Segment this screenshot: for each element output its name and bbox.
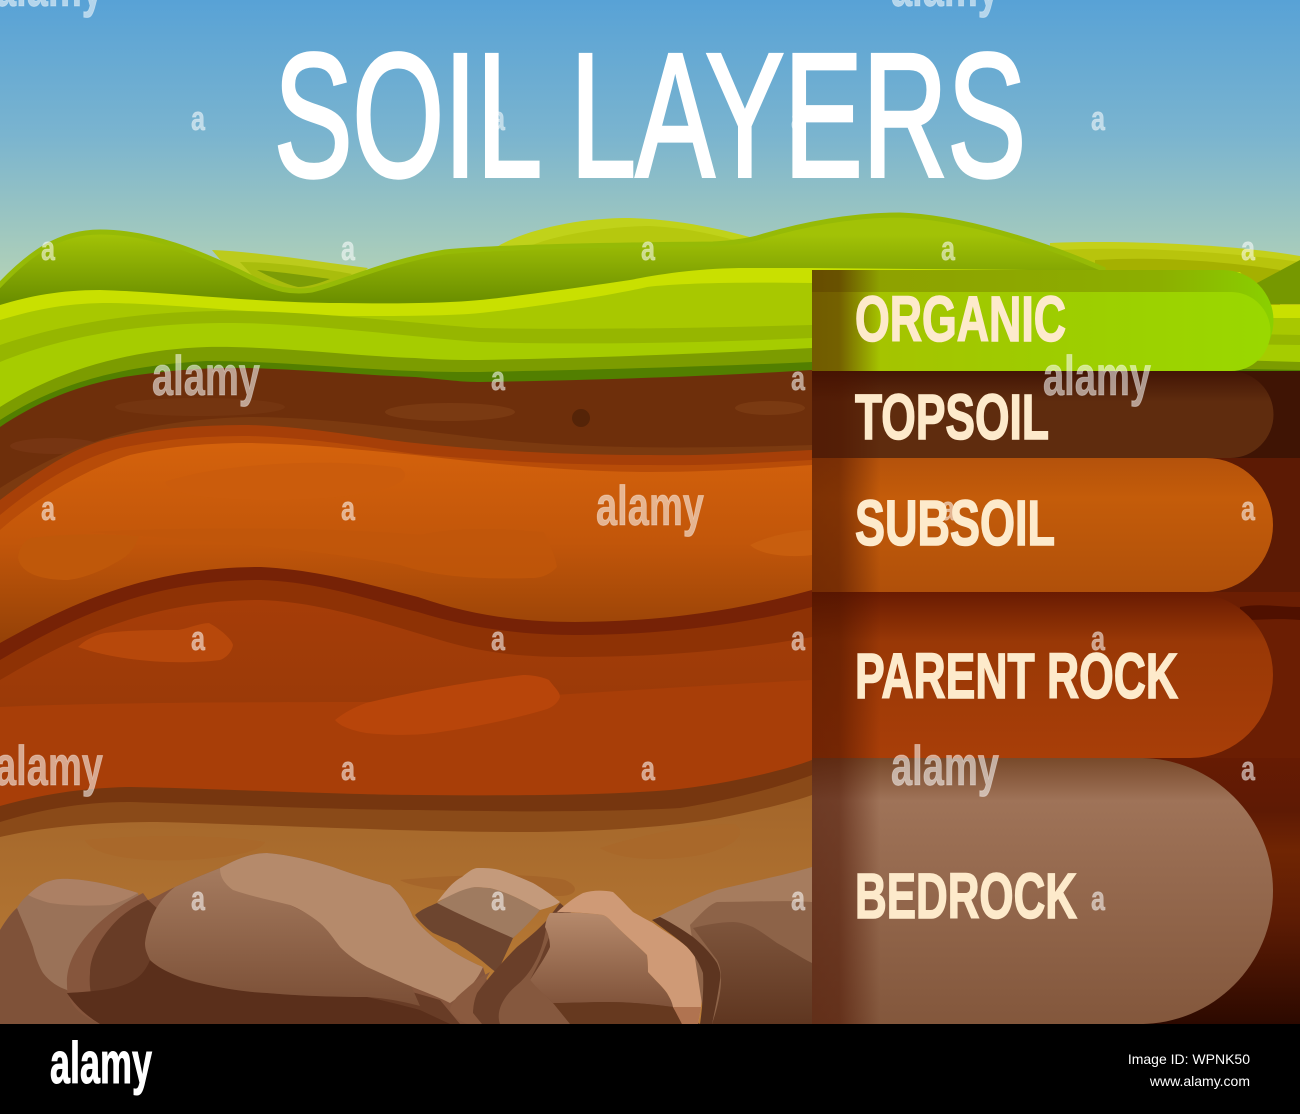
watermarks: a [41, 490, 56, 528]
right side dark hill [1255, 260, 1300, 304]
weathered sand layer [0, 760, 812, 1030]
watermarks: a [791, 880, 806, 918]
boulder: large centre [67, 853, 500, 1024]
side panel: layer key [812, 270, 1300, 1024]
watermarks: a [941, 490, 956, 528]
watermarks: alamy [1043, 344, 1151, 407]
boulder: small rear [415, 868, 560, 973]
footer logo: alamy [50, 1031, 152, 1096]
watermarks: a [491, 360, 506, 398]
watermarks: a [491, 620, 506, 658]
watermarks: a [641, 750, 656, 788]
subsoil layer [0, 417, 812, 700]
parent rock layer [0, 567, 812, 830]
watermarks: a [191, 880, 206, 918]
footer bar [0, 1024, 1300, 1114]
distant hills [212, 218, 1300, 320]
watermarks [0, 0, 1256, 918]
label: organic: ORGANIC [855, 283, 1066, 355]
footer image id: Image ID: WPNK50 [1128, 1051, 1250, 1067]
panel band: bedrock [812, 758, 1300, 1024]
panel band: organic [812, 270, 1274, 371]
topsoil layer [0, 368, 1300, 560]
rolling green hills [0, 215, 1103, 320]
watermarks: a [41, 230, 56, 268]
sky background [0, 0, 1300, 300]
label: subsoil: SUBSOIL [855, 487, 1055, 559]
watermarks: a [941, 230, 956, 268]
panel band: parent rock [812, 592, 1300, 758]
watermarks: a [341, 230, 356, 268]
watermarks: a [791, 360, 806, 398]
watermarks: a [191, 620, 206, 658]
watermarks: a [641, 230, 656, 268]
label: topsoil: TOPSOIL [855, 381, 1049, 453]
watermarks: a [341, 490, 356, 528]
watermarks: a [1241, 750, 1256, 788]
watermarks: a [791, 100, 806, 138]
organic grass layer [0, 268, 1300, 440]
label: bedrock: BEDROCK [855, 860, 1077, 932]
boulder: foreground centre [450, 891, 702, 1024]
watermarks: alamy [596, 474, 704, 537]
watermarks: a [491, 880, 506, 918]
panel band: subsoil [812, 458, 1300, 592]
watermarks: alamy [152, 344, 260, 407]
panel band: topsoil [812, 371, 1300, 458]
watermarks: a [1241, 230, 1256, 268]
watermarks: alamy [891, 734, 999, 797]
panel shadow edge [812, 270, 880, 1024]
watermarks: a [491, 100, 506, 138]
boulders [0, 853, 812, 1024]
footer site url: www.alamy.com [1149, 1073, 1250, 1089]
watermarks: a [1091, 880, 1106, 918]
watermarks: a [791, 620, 806, 658]
watermarks: a [1091, 100, 1106, 138]
watermarks: a [341, 750, 356, 788]
watermarks: a [191, 100, 206, 138]
watermarks: a [1241, 490, 1256, 528]
watermarks: a [1091, 620, 1106, 658]
boulder: far left [0, 879, 160, 1024]
boulder: right [652, 867, 812, 1024]
